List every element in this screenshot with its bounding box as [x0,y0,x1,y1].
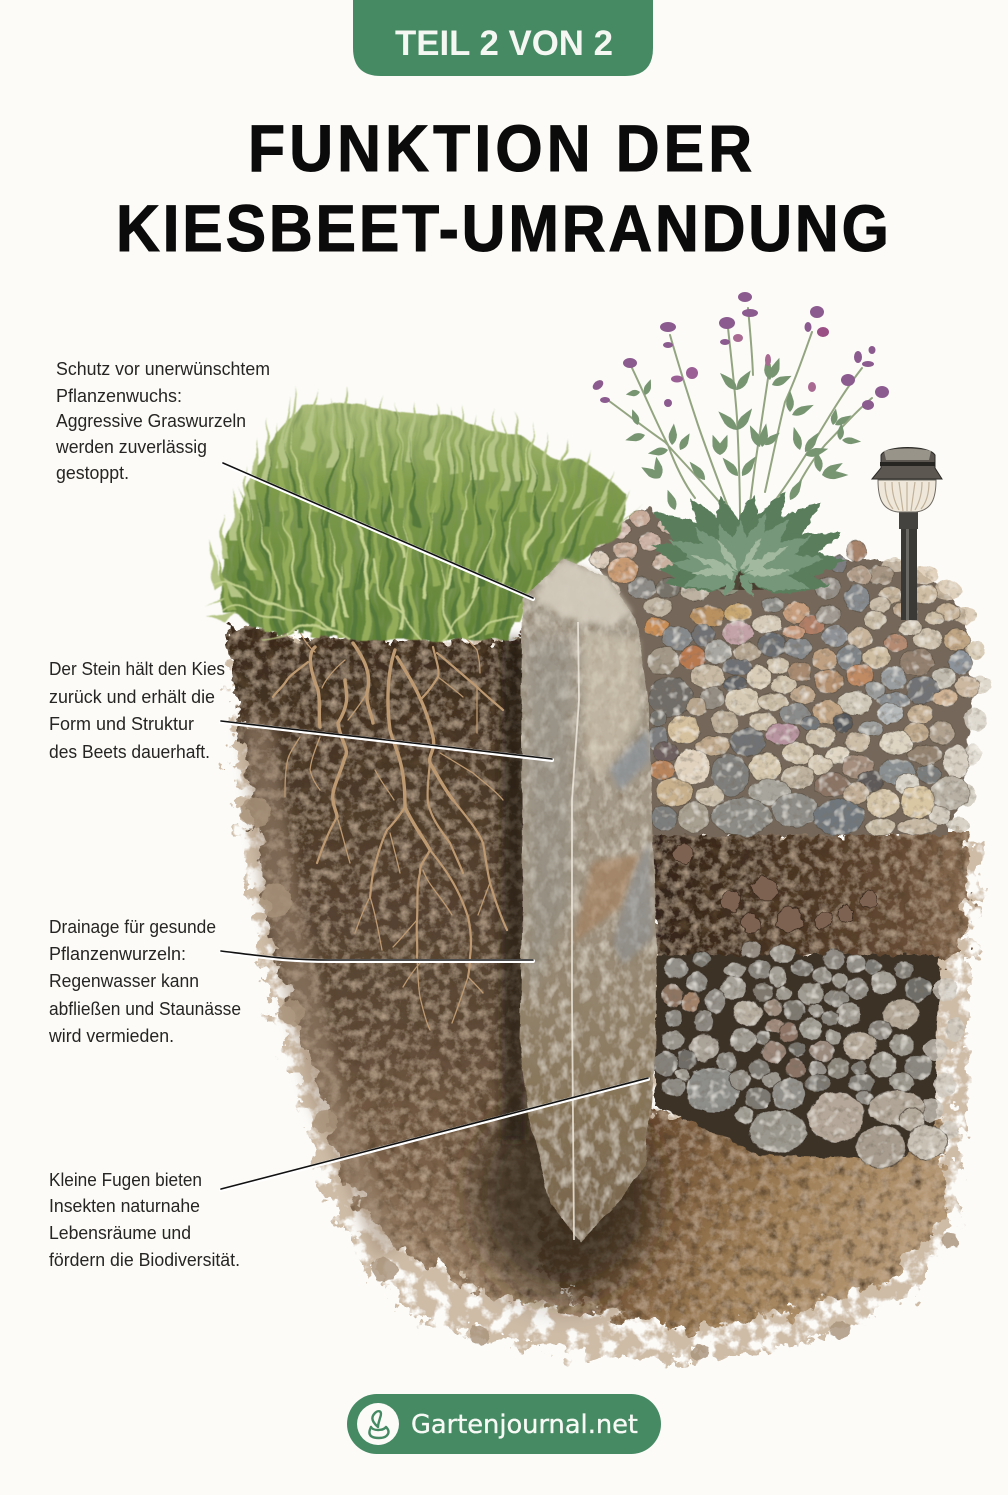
stone brown facet [573,854,640,943]
rosette pale leaves [689,535,792,584]
stone body [519,559,657,1242]
soil: dark layer under gravel [645,830,970,965]
badge: part indicator: TEIL 2 VON 2 [395,24,613,63]
callout text: drainage: abfließen und Staunässe [49,999,241,1019]
root twigs [285,632,503,1030]
soil: left edge fade [240,720,400,1255]
lavender node leaves [624,356,861,511]
callout text: gravel retention [49,659,225,762]
callout text: biodiversity: Kleine Fugen bieten [49,1170,202,1190]
garden solar lamp [872,448,942,620]
soil: sandy subsoil right [540,1110,945,1330]
callout text: plant protection: gestoppt. [56,463,129,483]
lamp roof [872,448,942,479]
callout text: drainage: Drainage für gesunde [49,917,216,937]
lavender stems [605,308,872,540]
grass blades light [230,415,605,635]
callout text: drainage [48,917,241,1046]
grass blades dark [238,430,590,640]
callout text: drainage: wird vermieden. [48,1026,174,1046]
callout text: gravel retention: zurück und erhält die [49,687,215,707]
stone grey facet upper [610,729,650,791]
rosette back leaves [642,483,848,602]
callout text: biodiversity: Lebensräume und [49,1223,191,1243]
callout text: biodiversity: Insekten naturnahe [49,1196,200,1216]
post highlight [906,528,909,620]
callout text: plant protection: Pflanzenwuchs: [56,386,182,406]
lavender rosette [642,483,848,602]
callout text: gravel retention: des Beets dauerhaft. [49,742,210,762]
grass blades mid [215,405,610,640]
callout text: gravel retention: Form und Struktur [49,714,194,734]
lamp roof highlight [884,449,931,460]
soil: left under lawn [225,618,640,1320]
callout text: plant protection: Schutz vor unerwünschtem [56,359,270,379]
lamp glass [878,480,936,512]
callout text: plant protection [55,359,270,483]
drainage gravel layer [654,941,964,1168]
illustration: soil cross-section [225,508,982,1360]
icon: sprout logo [357,1403,399,1445]
lamp collar [899,512,918,529]
title: KIESBEET-UMRANDUNG [116,193,889,266]
callout text: gravel retention: Der Stein hält den Kies [49,659,225,679]
stone crack [572,622,579,1240]
callout text: biodiversity [49,1170,240,1270]
gravel rim: pale washed stones [882,557,991,832]
lavender blossoms [591,292,889,410]
callout text: drainage: Regenwasser kann [49,971,199,991]
lawn roots [273,632,507,1030]
root branches [273,647,507,977]
turf body [222,405,630,640]
lamp post [901,528,917,620]
lavender plant [591,292,889,602]
top gravel layer [581,510,991,836]
callout lines [221,463,648,1190]
footer brand pill: Gartenjournal.net [411,1410,638,1440]
title: FUNKTION DER [248,113,752,186]
lamp roof band [880,462,935,466]
drainage gravel rim: pale stones [917,978,964,1139]
soil: outer pale wash [232,640,982,1360]
badge: part indicator [353,0,653,76]
soil: dark halo around stone tip [475,1095,655,1295]
stone grey facet lower [613,840,653,965]
grass tips pale [205,387,640,625]
lamp glass fluting [885,482,929,511]
root trunks [310,643,453,850]
gravel bed backing [585,508,972,835]
rosette mid leaves [664,510,826,599]
footer brand pill [347,1394,661,1454]
soil: crumbs around edge [241,797,958,1360]
callout text: plant protection: Aggressive Graswurzeln [56,411,246,431]
plant base shadow [675,566,815,590]
stone top cap [533,559,632,626]
stone right face highlight [582,630,640,780]
edging stone [519,559,657,1242]
lawn turf [205,387,640,640]
grass arching blades [215,560,520,640]
stones embedded in dark soil layer [673,844,876,933]
stone left face shading [528,640,572,1000]
drainage gravel backing [655,955,940,1160]
callout text: drainage: Pflanzenwurzeln: [49,944,186,964]
soil: dark strip along stone [502,640,526,1140]
callout text: biodiversity: fördern die Biodiversität. [49,1250,240,1270]
callout text: plant protection: werden zuverlässig [55,437,207,457]
title [116,113,889,266]
